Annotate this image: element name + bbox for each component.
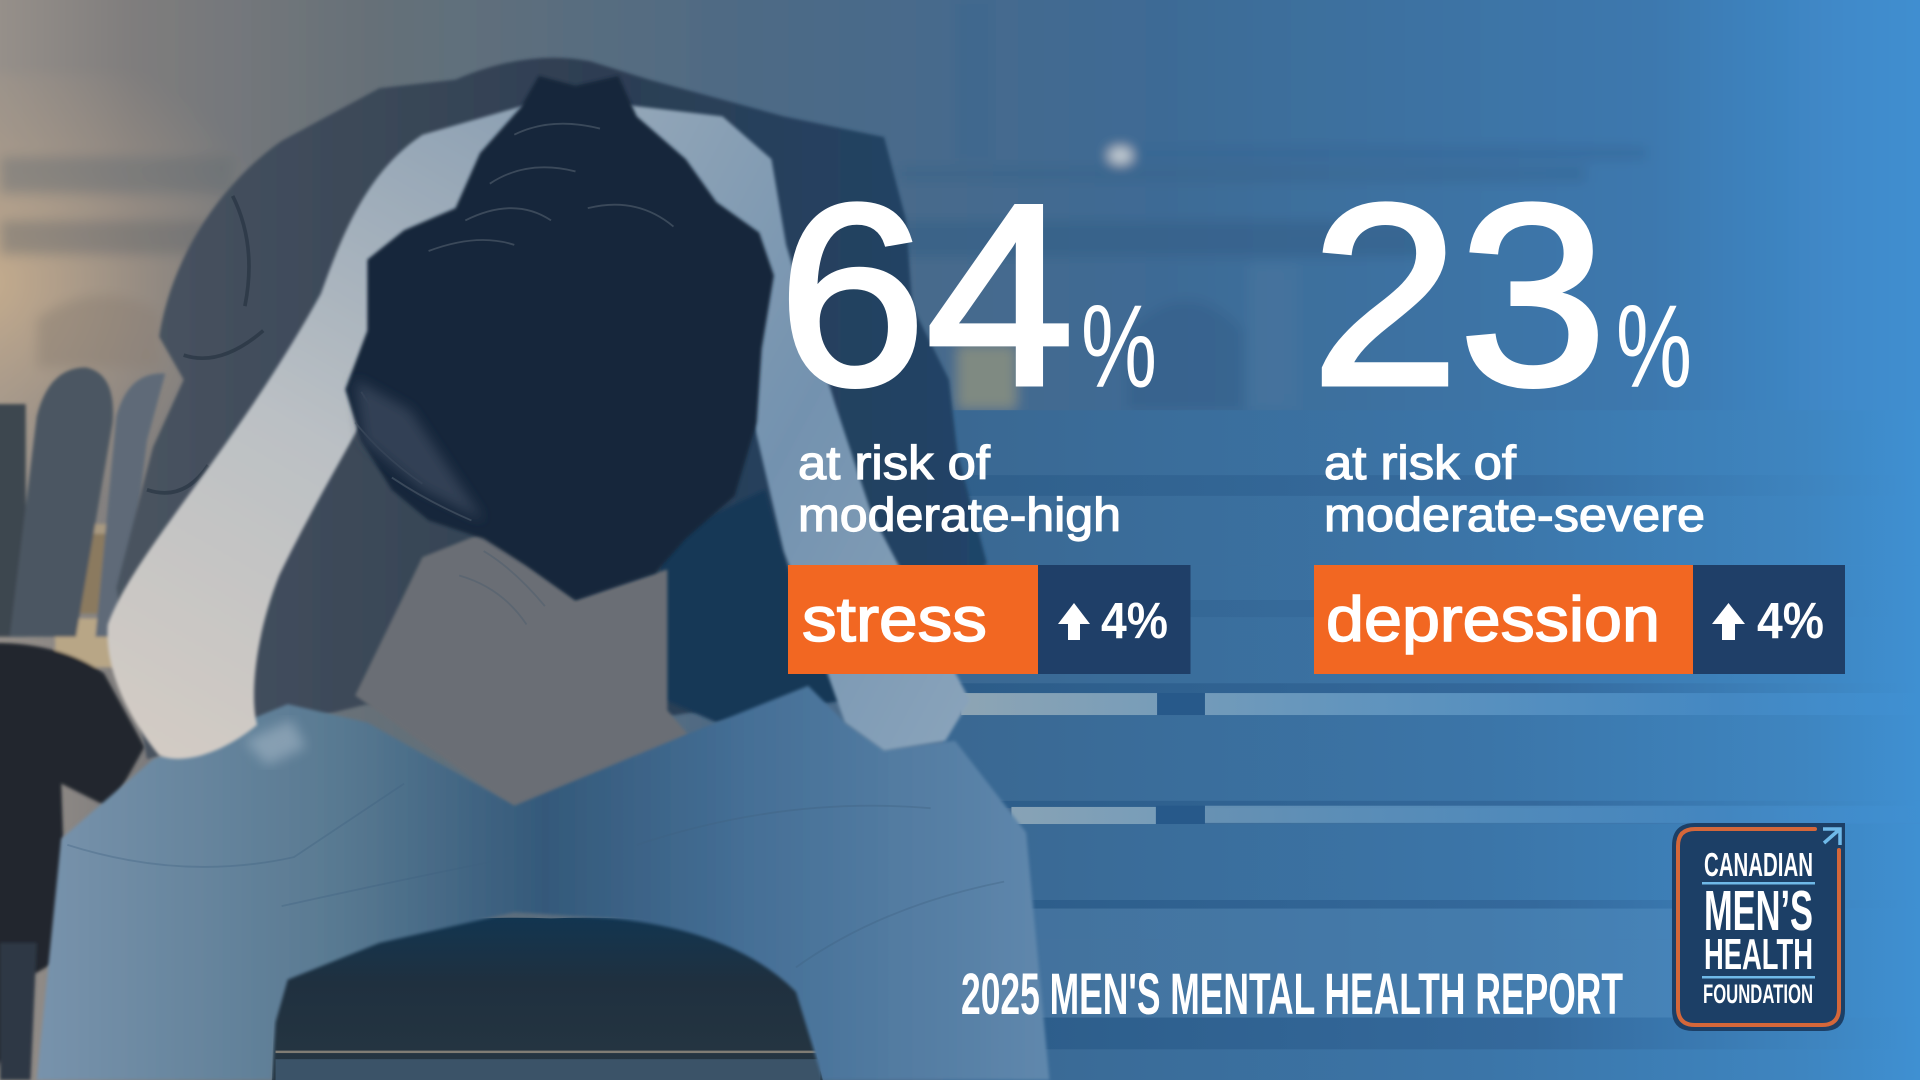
orange depression label <box>1314 565 1693 674</box>
percent sign: % <box>1616 281 1692 413</box>
description: moderate-severe <box>1324 488 1705 541</box>
man: shirt <box>355 533 688 808</box>
big number 23: 23 <box>1311 150 1607 439</box>
description: moderate-high <box>798 488 1121 541</box>
man: inner jacket dark <box>661 490 857 722</box>
man: jeans creases <box>67 784 1004 967</box>
man: knee highlight <box>245 720 306 765</box>
man: hair <box>345 76 774 600</box>
man: right forearm and hand <box>618 104 970 751</box>
navy change badge: 4% <box>1101 592 1168 649</box>
man: seat edge lines <box>276 1051 820 1080</box>
man: hair strands <box>355 124 673 624</box>
logo: Canadian Men's Health Foundation: FOUNDATION <box>1703 979 1813 1009</box>
navy change badge <box>1693 565 1845 674</box>
bench slats <box>943 410 1920 1080</box>
description: at risk of <box>798 436 991 489</box>
description: at risk of <box>1324 436 1517 489</box>
logo: Canadian Men's Health Foundation: HEALTH <box>1704 930 1813 979</box>
percent sign: % <box>1081 281 1157 413</box>
logo: Canadian Men's Health Foundation <box>1672 823 1845 1031</box>
navy change badge: 4% <box>1757 592 1824 649</box>
navy change badge <box>1038 565 1190 674</box>
logo: Canadian Men's Health Foundation: MEN’S <box>1704 879 1813 943</box>
bench armrests left <box>0 367 165 1080</box>
big number 64: 64 <box>778 150 1074 439</box>
orange depression label: depression <box>1326 585 1660 655</box>
man: left forearm and hand <box>107 104 529 759</box>
stat 64 percent stress <box>778 150 1190 674</box>
orange stress label <box>788 565 1038 674</box>
man: seat <box>272 918 823 1080</box>
man: jacket <box>116 58 987 759</box>
man: jeans <box>37 686 1049 1080</box>
stat 23 percent depression <box>1311 150 1845 674</box>
logo: Canadian Men's Health Foundation: CANADIAN <box>1704 846 1813 883</box>
description <box>1324 436 1705 541</box>
man: hair highlight lower left <box>355 380 484 520</box>
man: jacket folds <box>147 196 263 493</box>
orange stress label: stress <box>802 585 987 655</box>
description <box>798 436 1121 541</box>
